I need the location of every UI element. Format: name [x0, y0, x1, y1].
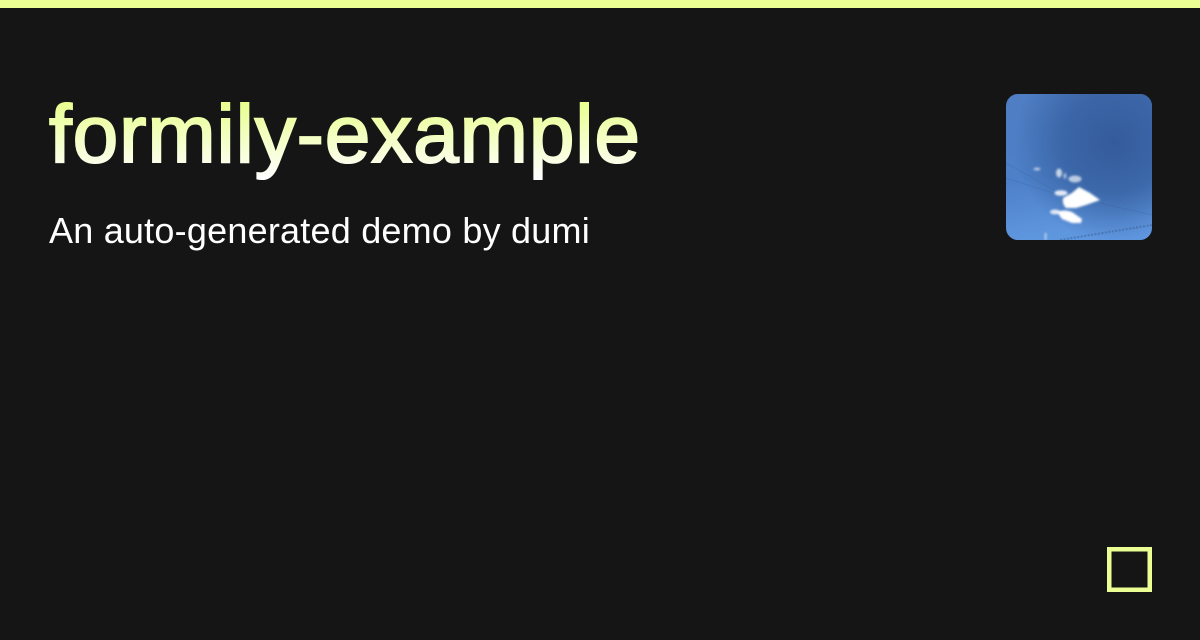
image: blue sky with clouds [1006, 94, 1152, 240]
top accent bar [0, 0, 1200, 8]
icon: clouds [1034, 168, 1100, 240]
subtitle: An auto-generated demo by dumi [49, 210, 590, 251]
logo: outlined square [1107, 547, 1152, 592]
title: formily-example [49, 89, 640, 180]
